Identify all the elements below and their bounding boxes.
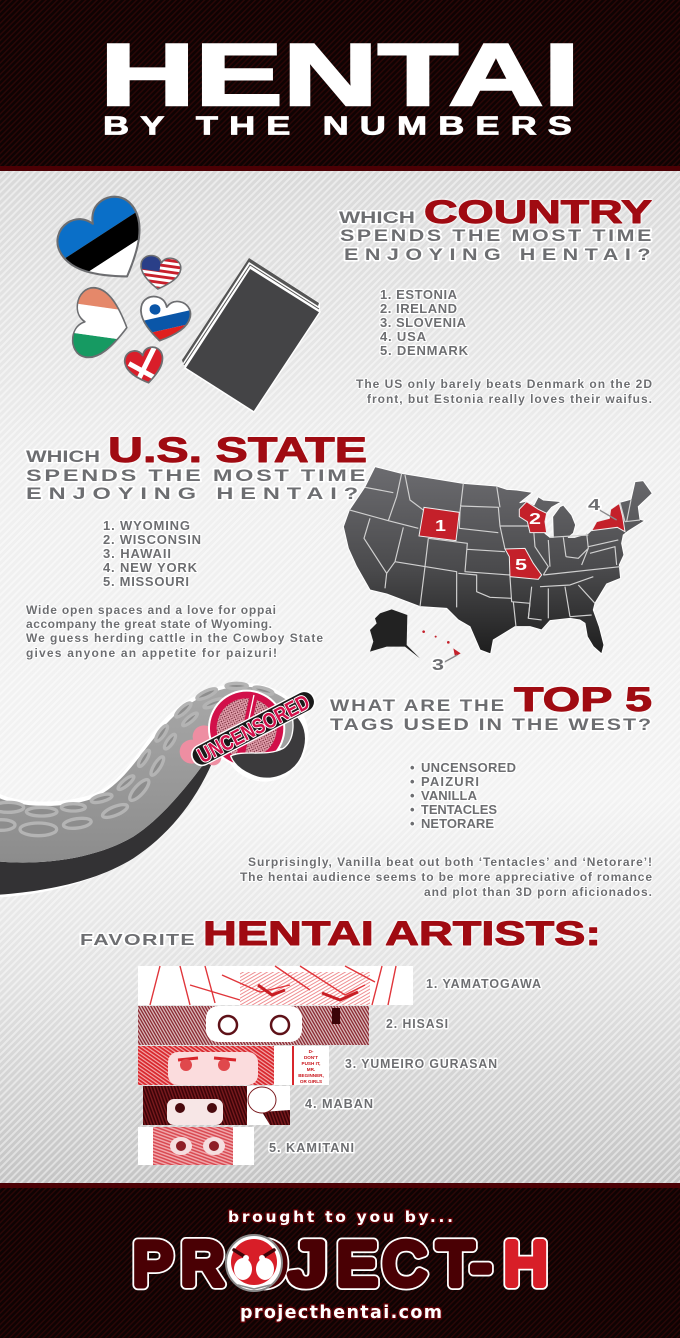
- footer website: projecthentai.com: [240, 1303, 442, 1323]
- state: Hawaii: [422, 630, 461, 657]
- speech balloon text: MR.: [307, 1067, 315, 1072]
- country ranking list: [380, 287, 469, 358]
- speech balloon text: D-: [309, 1049, 314, 1054]
- artists heading: HENTAI ARTISTS:: [203, 915, 601, 953]
- map rank numbers: 3: [432, 657, 444, 674]
- artist bar 3: [138, 1046, 329, 1085]
- artist names: 4. MABAN: [305, 1096, 374, 1111]
- tags note: Surprisingly, Vanilla beat out both ‘Tentacles’ and ‘Netorare’!: [248, 855, 652, 869]
- speech balloon text: OR GIRLS: [300, 1079, 322, 1084]
- tags list: •: [410, 788, 415, 803]
- Project-H wordmark: J: [290, 1230, 326, 1298]
- state note: gives anyone an appetite for paizuri!: [26, 646, 277, 660]
- artists heading: [80, 915, 601, 953]
- tags heading: TAGS USED IN THE WEST?: [330, 716, 653, 734]
- state: New York: [592, 503, 625, 532]
- icon: closed book: [182, 258, 320, 413]
- artist bar 2: [138, 1006, 369, 1045]
- contiguous states: [343, 467, 652, 654]
- country ranking list: 3. SLOVENIA: [380, 315, 467, 330]
- artist bar 4: [143, 1086, 290, 1125]
- state note: We guess herding cattle in the Cowboy State: [26, 631, 323, 645]
- country note: front, but Estonia really loves their waifus.: [367, 392, 652, 406]
- tags heading: TOP 5: [514, 681, 652, 719]
- panel: favorite artists: [80, 915, 601, 1165]
- panel: U.S. state: [26, 431, 652, 674]
- speech balloon text: PUSH IT,: [302, 1061, 320, 1066]
- state borders: [349, 473, 640, 627]
- uncensored banner: UNCENSORED: [194, 690, 314, 768]
- tags list: •: [410, 816, 415, 831]
- title: HENTAI: [100, 25, 580, 124]
- artists heading: FAVORITE: [80, 932, 196, 949]
- Project-H wordmark: PRO: [133, 1230, 287, 1298]
- state: Wyoming: [419, 507, 459, 541]
- tags list: •: [410, 774, 415, 789]
- page background: [0, 170, 680, 1184]
- subtitle: BY THE NUMBERS: [103, 110, 583, 140]
- map rank numbers: 1: [435, 518, 446, 535]
- country ranking list: 4. USA: [380, 329, 427, 344]
- tentacle illustration: [0, 683, 320, 897]
- header band: [0, 0, 680, 171]
- footer band: [0, 1183, 680, 1338]
- panel: country: [56, 196, 653, 413]
- icon: Slovenia heart: [140, 296, 192, 342]
- artist bar 5: [138, 1127, 254, 1165]
- tags note: and plot than 3D porn aficionados.: [424, 885, 652, 899]
- arrow: New York: [598, 509, 617, 520]
- state: Wisconsin: [519, 502, 547, 533]
- state heading: WHICH: [26, 447, 100, 466]
- speech balloon text: [298, 1049, 324, 1084]
- tags list: •: [410, 802, 415, 817]
- tags heading: WHAT ARE THE: [330, 697, 506, 715]
- state note: accompany the great state of Wyoming.: [26, 617, 272, 631]
- tentacle body: [0, 687, 301, 863]
- artist names: 1. YAMATOGAWA: [426, 976, 542, 991]
- icon: Estonia heart: [56, 196, 141, 278]
- US map: [343, 467, 652, 663]
- state heading: ENJOYING HENTAI?: [26, 484, 365, 503]
- state heading: [26, 431, 368, 503]
- tags list: UNCENSORED: [421, 760, 516, 775]
- tags list: •: [410, 760, 415, 775]
- country heading: ENJOYING HENTAI?: [344, 246, 657, 264]
- state ranking list: 4. NEW YORK: [103, 560, 198, 575]
- curled tentacle tip: [231, 710, 306, 778]
- artist names: 3. YUMEIRO GURASAN: [345, 1056, 498, 1071]
- artist names: [269, 976, 542, 1155]
- tentacle suckers: [0, 683, 274, 836]
- icon: Denmark heart: [124, 346, 164, 384]
- state note: [26, 603, 323, 660]
- Project-H wordmark: [133, 1230, 547, 1298]
- Project-H wordmark: ECT-H: [337, 1230, 547, 1298]
- country ranking list: 5. DENMARK: [380, 343, 469, 358]
- tags list: [410, 760, 516, 831]
- logo emblem: [226, 1235, 282, 1291]
- state ranking list: [103, 518, 201, 589]
- state heading: U.S. STATE: [108, 431, 367, 470]
- tentacle underside: [0, 760, 213, 895]
- tags list: VANILLA: [421, 788, 478, 803]
- icon: USA heart: [140, 254, 182, 290]
- country heading: [339, 194, 657, 264]
- state ranking list: 1. WYOMING: [103, 518, 190, 533]
- tentacle outline: [0, 683, 308, 897]
- Project-H wordmark: PRO: [133, 1230, 287, 1298]
- country heading: WHICH: [339, 208, 415, 227]
- map rank numbers: 2: [529, 511, 541, 528]
- tags list: TENTACLES: [421, 802, 497, 817]
- artist bar 1: [138, 966, 413, 1005]
- map rank numbers: [432, 497, 600, 674]
- country heading: SPENDS THE MOST TIME: [340, 227, 654, 245]
- tags heading: [330, 681, 653, 734]
- Project-H wordmark: ECT-H: [337, 1230, 547, 1298]
- map rank numbers: 5: [515, 557, 527, 574]
- state note: Wide open spaces and a love for oppai: [26, 603, 276, 617]
- country ranking list: 2. IRELAND: [380, 301, 457, 316]
- state: Missouri: [505, 548, 542, 579]
- tags list: NETORARE: [421, 816, 494, 831]
- country note: [356, 377, 652, 406]
- tags note: [240, 855, 652, 899]
- state heading: SPENDS THE MOST TIME: [26, 466, 368, 485]
- country note: The US only barely beats Denmark on the 2D: [356, 377, 652, 391]
- state ranking list: 5. MISSOURI: [103, 574, 189, 589]
- state: Alaska: [370, 609, 420, 658]
- country ranking list: 1. ESTONIA: [380, 287, 458, 302]
- prohibition badge: [208, 690, 285, 767]
- icon: Ireland heart: [72, 286, 128, 358]
- state ranking list: 3. HAWAII: [103, 546, 171, 561]
- panel: top tags: [0, 681, 653, 899]
- artist names: 2. HISASI: [386, 1016, 449, 1031]
- speech balloon text: DON'T: [304, 1055, 318, 1060]
- pink burst: [180, 725, 221, 765]
- map rank numbers: 4: [588, 497, 600, 514]
- state ranking list: 2. WISCONSIN: [103, 532, 201, 547]
- artist names: 5. KAMITANI: [269, 1140, 355, 1155]
- tags list: PAIZURI: [421, 774, 479, 789]
- country heading: COUNTRY: [424, 194, 652, 230]
- Project-H wordmark: J: [290, 1230, 326, 1298]
- tags note: The hentai audience seems to be more appreciative of romance: [240, 870, 652, 884]
- arrow: Hawaii: [443, 655, 457, 663]
- footer credit line: brought to you by...: [228, 1208, 453, 1226]
- speech balloon text: BEGINNER,: [298, 1073, 324, 1078]
